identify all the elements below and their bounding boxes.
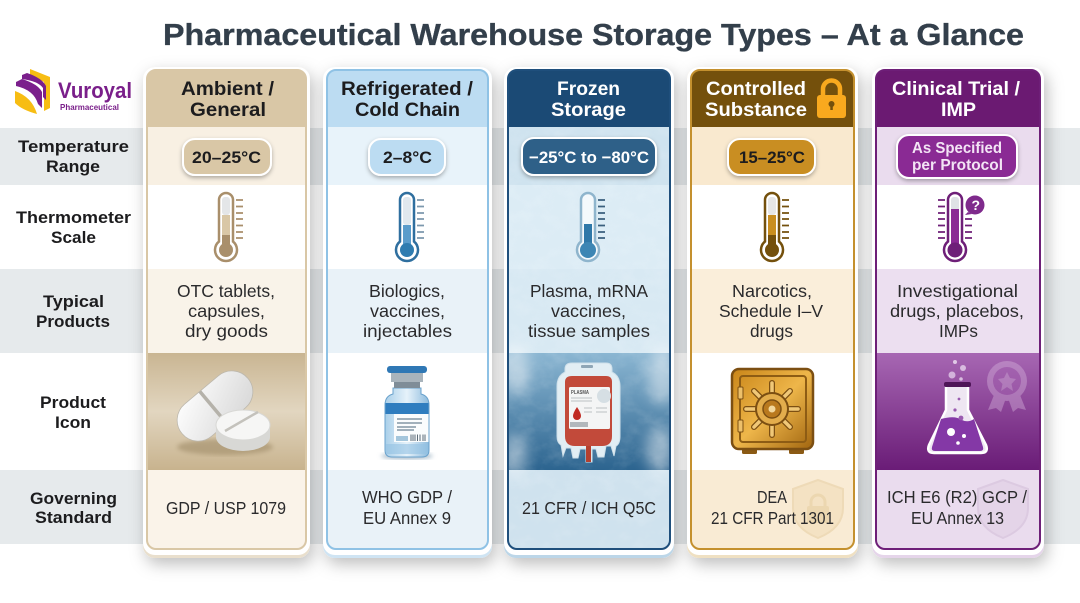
- row labels: Product: [40, 393, 106, 412]
- heading: Storage: [551, 100, 626, 121]
- logo: Vuroyal Pharmaceutical: Vuroyal: [58, 78, 132, 103]
- governing standard: WHO GDP /: [362, 487, 452, 507]
- governing standard: EU Annex 13: [911, 508, 1004, 528]
- row labels: Products: [36, 312, 110, 331]
- typical products: drugs, placebos,: [890, 301, 1024, 321]
- heading: [551, 79, 626, 121]
- panel: Ambient / General: [143, 67, 310, 558]
- temperature pill: [183, 139, 271, 175]
- governing standard: GDP / USP 1079: [166, 498, 286, 518]
- heading: Clinical Trial /: [892, 79, 1021, 100]
- typical products: injectables: [363, 321, 452, 341]
- icon: rosette watermark: [987, 361, 1027, 412]
- panel: Refrigerated / Cold Chain: [323, 67, 492, 558]
- logo: Vuroyal Pharmaceutical: Pharmaceutical: [60, 102, 119, 112]
- panel: Clinical Trial / IMP: [872, 67, 1044, 558]
- row labels: Range: [46, 157, 100, 176]
- temperature pill: [522, 138, 656, 175]
- icon: shield watermark: [793, 480, 843, 538]
- heading: Cold Chain: [355, 100, 460, 121]
- icon: frozen plasma bag: [557, 363, 620, 462]
- heading: Ambient /: [181, 79, 275, 100]
- icon: padlock: [817, 80, 846, 118]
- typical products: [177, 281, 275, 341]
- typical products: Biologics,: [369, 281, 445, 301]
- logo: Vuroyal Pharmaceutical: [15, 69, 132, 114]
- heading: General: [190, 100, 266, 121]
- icon: vial: [381, 366, 433, 459]
- row labels: Governing: [30, 489, 117, 508]
- governing standard: EU Annex 9: [363, 508, 451, 528]
- typical products: [890, 281, 1024, 341]
- temperature pill: 2–8°C: [383, 148, 432, 167]
- heading: IMP: [941, 100, 976, 121]
- typical products: OTC tablets,: [177, 281, 275, 301]
- governing standard: 21 CFR / ICH Q5C: [522, 498, 656, 518]
- typical products: Investigational: [897, 281, 1018, 301]
- temperature pill: [897, 135, 1017, 178]
- row labels: Standard: [35, 508, 112, 527]
- typical products: dry goods: [185, 321, 268, 341]
- temperature pill: per Protocol: [912, 157, 1003, 174]
- typical products: capsules,: [188, 301, 265, 321]
- icon: frozen plasma bag: PLASMA: [571, 390, 589, 396]
- temperature pill: As Specified: [912, 140, 1002, 157]
- governing standard: [887, 487, 1027, 528]
- temperature pill: −25°C to −80°C: [529, 148, 649, 167]
- row stripes: [0, 128, 1080, 544]
- icon: thermometer: [215, 193, 243, 261]
- heading: Substance: [705, 100, 807, 121]
- typical products: vaccines,: [370, 301, 445, 321]
- temperature pill: 20–25°C: [192, 148, 261, 167]
- typical products: [363, 281, 452, 341]
- governing standard: [711, 487, 834, 528]
- row labels: Typical: [43, 292, 104, 311]
- typical products: Narcotics,: [732, 281, 812, 301]
- heading: [341, 79, 474, 121]
- icon: shield watermark: [978, 480, 1028, 538]
- icon: thermometer: [577, 193, 605, 261]
- typical products: drugs: [750, 321, 793, 341]
- panel: Frozen Storage: [502, 67, 676, 558]
- temperature pill: [728, 139, 815, 175]
- temperature pill: 15–25°C: [739, 148, 805, 167]
- row labels: Icon: [55, 413, 91, 432]
- title: Pharmaceutical Warehouse Storage Types – At a Glance: [163, 17, 1024, 52]
- row labels: Thermometer: [16, 208, 131, 227]
- temperature pill: [369, 139, 445, 175]
- heading: [181, 79, 275, 121]
- typical products: [719, 281, 823, 341]
- governing standard: [362, 487, 452, 528]
- row labels: Scale: [51, 228, 96, 247]
- typical products: IMPs: [939, 321, 978, 341]
- typical products: [528, 281, 650, 341]
- icon: thermometer: [396, 193, 424, 261]
- typical products: Plasma, mRNA: [530, 281, 648, 301]
- icon: thermometer with question mark: [938, 193, 984, 261]
- icon: thermometer: [761, 193, 789, 261]
- row labels: [16, 137, 131, 527]
- icon: safe: [732, 369, 813, 454]
- heading: [892, 79, 1021, 121]
- icon: flask: [928, 360, 987, 453]
- typical products: vaccines,: [551, 301, 626, 321]
- governing standard: ICH E6 (R2) GCP /: [887, 487, 1027, 507]
- typical products: tissue samples: [528, 321, 650, 341]
- heading: Frozen: [557, 79, 620, 100]
- heading: Controlled: [706, 79, 806, 100]
- row labels: Temperature: [18, 137, 129, 156]
- typical products: Schedule I–V: [719, 301, 823, 321]
- heading: Refrigerated /: [341, 79, 474, 100]
- icon: thermometer with question mark: ?: [972, 197, 980, 213]
- icon: white pills: [169, 362, 273, 455]
- governing standard: 21 CFR Part 1301: [711, 508, 834, 528]
- panel: Controlled Substance: [687, 67, 858, 558]
- governing standard: DEA: [757, 487, 787, 507]
- heading: [705, 79, 807, 121]
